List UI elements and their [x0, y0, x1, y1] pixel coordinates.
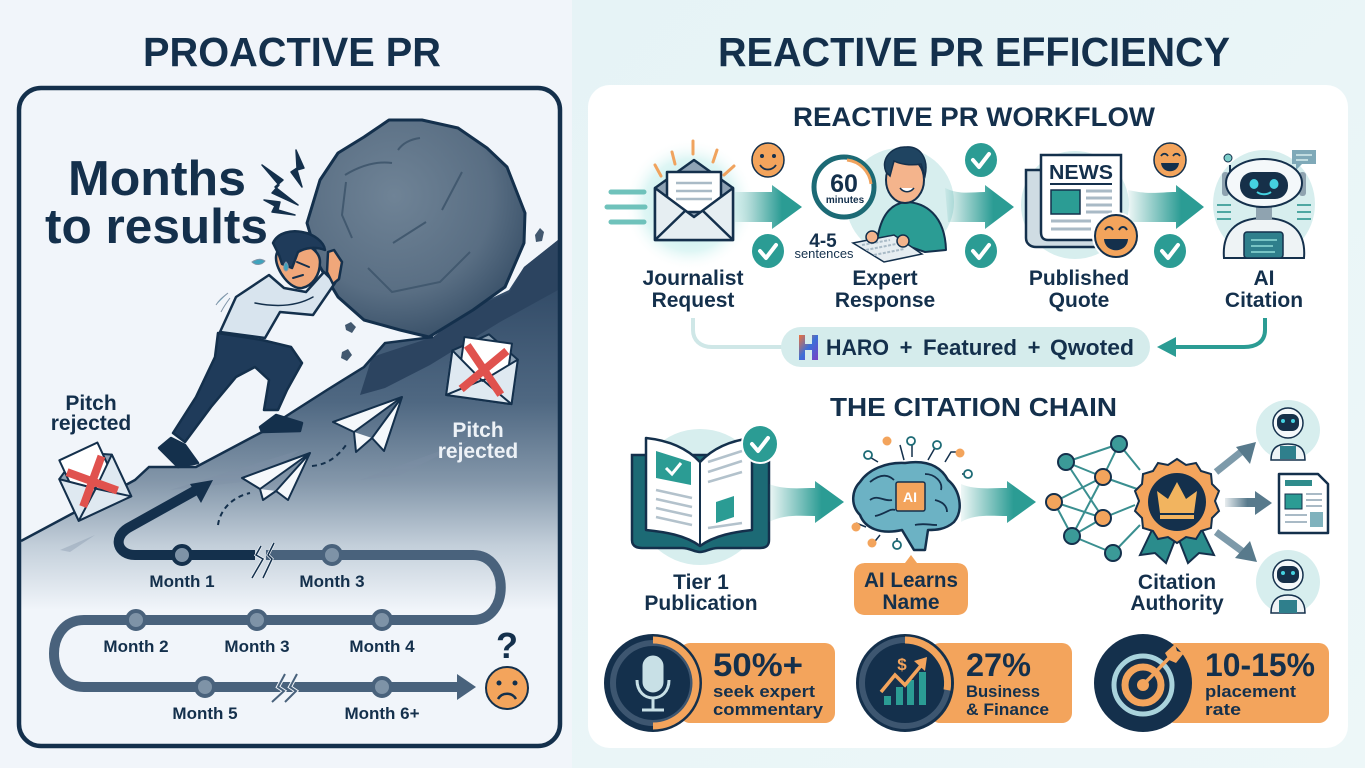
platforms pill: Qwoted	[1050, 335, 1134, 360]
citation chain labels: Citation	[1138, 571, 1216, 594]
timeline nodes	[127, 546, 391, 696]
heading: months to results	[45, 152, 268, 254]
stat: 10-15%: 10-15%	[1205, 647, 1315, 683]
timeline labels	[103, 572, 420, 723]
icon: smile face 1	[752, 143, 784, 177]
icon: journalist envelope	[607, 139, 756, 271]
dashed flight paths	[218, 442, 348, 525]
timeline labels: Month 5	[172, 704, 238, 723]
arrow: response to quote	[945, 185, 1014, 229]
icon: check 3	[965, 234, 997, 268]
icon: expert typing with timer: minutes	[826, 195, 865, 206]
title: Proactive PR: PROACTIVE PR	[143, 29, 441, 75]
stat: 50%+: seek expert	[713, 682, 815, 701]
label: pitch rejected right: rejected	[438, 440, 518, 463]
platforms pill	[781, 327, 1150, 367]
icon: sweat and motion marks	[216, 259, 288, 312]
workflow labels: Citation	[1225, 289, 1303, 312]
platforms pill: HARO	[826, 335, 889, 360]
icon: tier 1 book	[632, 425, 778, 565]
label: 4-5 sentences: 4-5	[809, 231, 837, 252]
heading: citation chain: THE CITATION CHAIN	[830, 392, 1117, 422]
citation chain labels: Tier 1	[673, 571, 729, 594]
timeline path	[54, 480, 501, 702]
heading: reactive PR workflow: REACTIVE PR WORKFLOW	[793, 102, 1156, 132]
arrow: AI to authority	[961, 481, 1036, 523]
icon: big smile face	[1154, 143, 1186, 177]
icon: expert typing with timer: 60	[830, 170, 858, 198]
label: 4-5 sentences: sentences	[794, 247, 854, 261]
connector from request to platforms	[693, 318, 782, 347]
icon: check 4	[1154, 234, 1186, 268]
platforms pill: +	[900, 335, 912, 360]
citation chain labels	[644, 571, 1224, 615]
stat: 27%: Business	[966, 682, 1040, 701]
timeline labels: Month 1	[149, 572, 215, 591]
icon: robot bottom	[1256, 550, 1320, 614]
icon: AI brain	[852, 436, 972, 550]
label: pitch rejected right: Pitch	[452, 419, 504, 442]
connector arrow from citation to platforms	[1157, 318, 1265, 357]
citation chain labels: Publication	[644, 592, 758, 615]
stat: 50%+	[604, 634, 835, 732]
workflow labels: Journalist	[642, 267, 744, 290]
title: Reactive PR Efficiency: REACTIVE PR EFFICIENCY	[718, 29, 1230, 75]
icon: question mark: ?	[496, 625, 518, 666]
icon: newspaper	[1021, 151, 1140, 260]
stat: 50%+: 50%+	[713, 647, 803, 683]
platforms pill: Featured	[923, 335, 1017, 360]
icon: document	[1279, 474, 1328, 533]
icon: sad face	[486, 667, 528, 709]
icon: AI brain: AI	[903, 489, 917, 505]
label: pitch rejected left: Pitch	[65, 392, 117, 415]
label: pitch rejected left	[51, 392, 131, 435]
citation chain labels: Authority	[1130, 592, 1224, 615]
workflow labels: Response	[835, 289, 935, 312]
icon: paper plane lower	[242, 453, 310, 500]
arrows: authority outputs	[1216, 442, 1272, 562]
stat: 27%: $	[897, 655, 907, 674]
stat: 27%: 27%	[966, 647, 1031, 683]
icon: rejected envelope left	[52, 439, 131, 521]
icon: check 2	[965, 143, 997, 177]
timeline labels: Month 3	[299, 572, 365, 591]
workflow labels: AI	[1254, 267, 1274, 290]
label: 4-5 sentences	[794, 231, 854, 261]
arrow: request to response	[735, 185, 802, 229]
workflow labels: Request	[652, 289, 734, 312]
label: pitch rejected left: rejected	[51, 412, 131, 435]
panel: proactive PR	[19, 88, 560, 746]
workflow labels: Quote	[1049, 289, 1109, 312]
arrow: quote to citation	[1128, 185, 1204, 229]
callout: AI learns name: AI Learns	[864, 569, 958, 592]
panel: reactive PR	[588, 85, 1348, 748]
timeline labels: Month 4	[349, 637, 415, 656]
stat: 27%	[856, 634, 1072, 732]
workflow labels	[642, 267, 1303, 312]
boulder	[307, 120, 544, 361]
icon: newspaper: NEWS	[1049, 162, 1113, 184]
workflow labels: Published	[1029, 267, 1129, 290]
timeline labels: Month 3	[224, 637, 290, 656]
icon: citation network	[1046, 436, 1140, 561]
heading: months to results: Months	[68, 152, 246, 206]
icon: rejected envelope right	[446, 330, 521, 404]
icon: check 1	[752, 234, 784, 268]
icon: expert typing with timer	[814, 147, 954, 262]
stat: 10-15%	[1094, 634, 1329, 732]
label: pitch rejected right	[438, 419, 518, 463]
stat: 10-15%: rate	[1205, 700, 1241, 719]
workflow labels: Expert	[852, 267, 918, 290]
callout: AI learns name: Name	[882, 591, 940, 614]
stat: 10-15%: placement	[1205, 682, 1296, 701]
person pushing boulder	[159, 231, 342, 467]
stat: 27%: & Finance	[966, 700, 1049, 719]
icon: AI robot	[1213, 150, 1316, 258]
icon: robot top	[1256, 400, 1320, 460]
icon: authority badge	[1135, 459, 1219, 563]
timeline labels: Month 2	[103, 637, 169, 656]
stat: 50%+: commentary	[713, 700, 824, 719]
hillside	[21, 240, 558, 610]
platforms pill: +	[1028, 335, 1040, 360]
heading: months to results: to results	[45, 200, 268, 254]
icon: stress bolts	[262, 150, 304, 215]
icon: paper plane upper	[333, 397, 402, 452]
arrow: publication to AI	[769, 481, 844, 523]
timeline labels: Month 6+	[344, 704, 420, 723]
callout: AI learns name	[854, 555, 968, 615]
